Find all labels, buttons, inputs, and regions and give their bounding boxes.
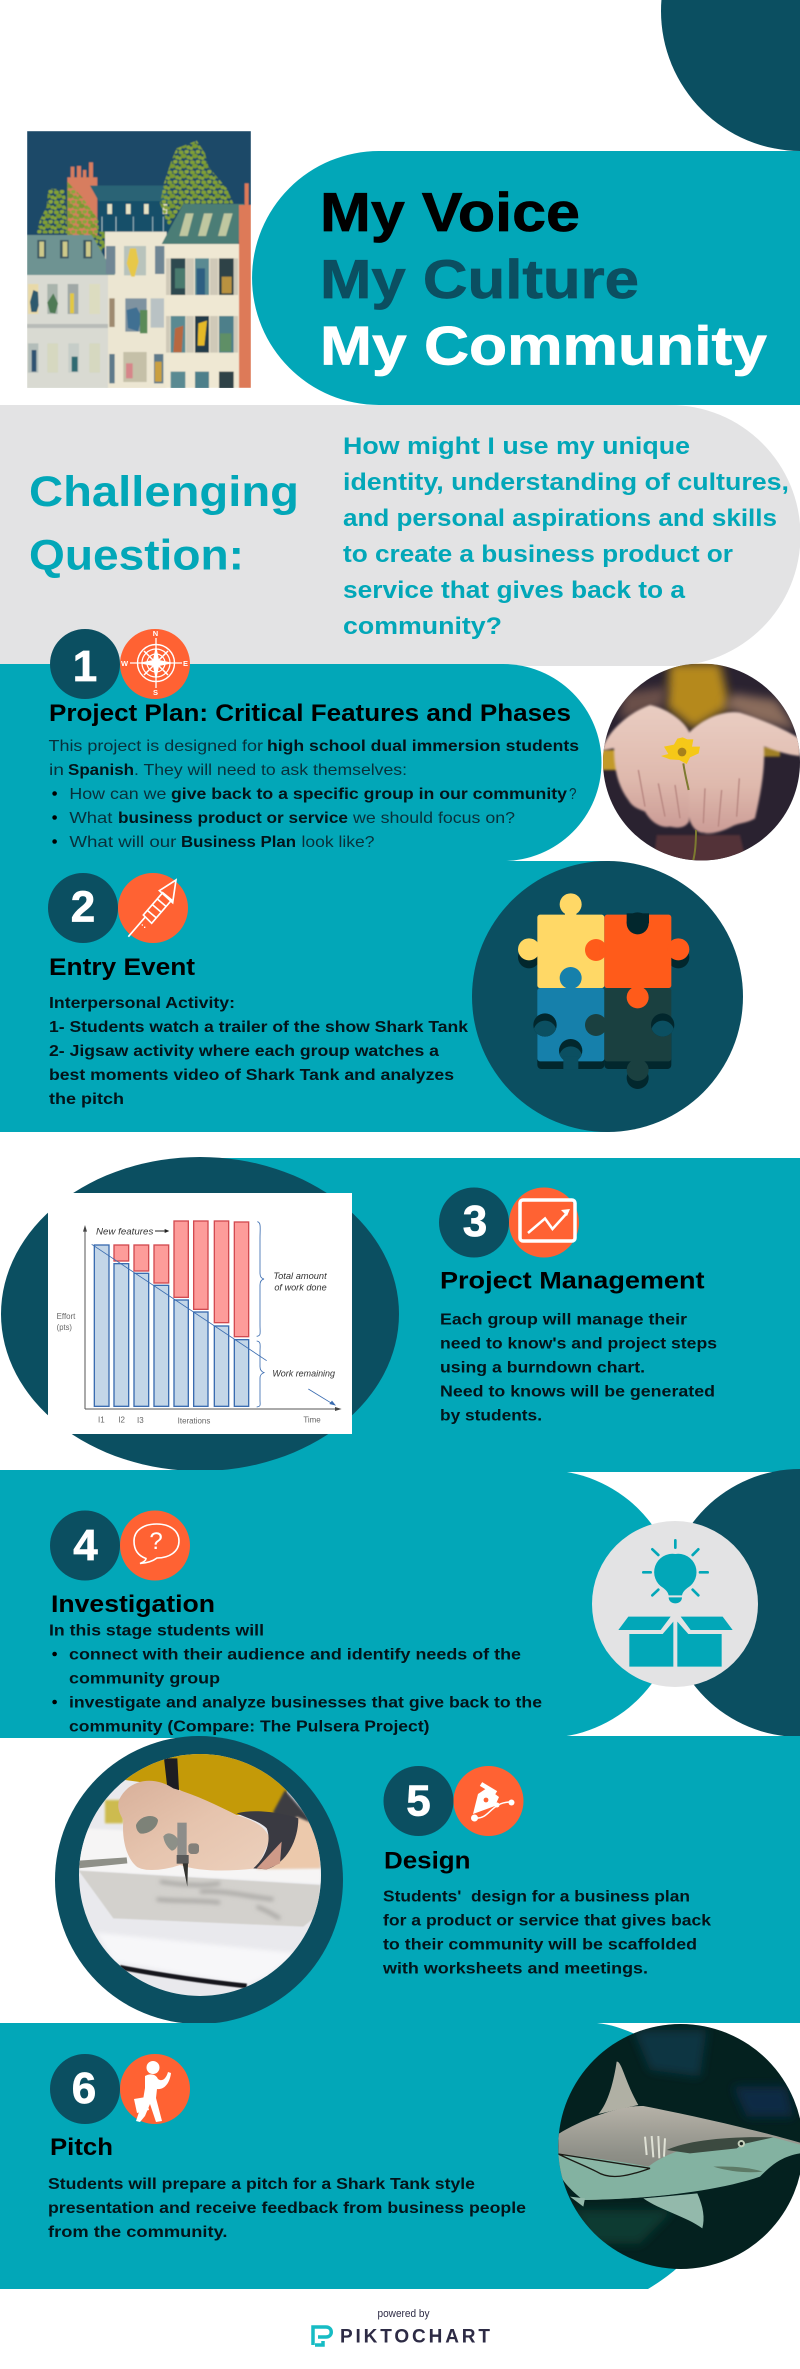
badge: step 4 number <box>50 1510 120 1580</box>
photo: hands holding flower <box>600 663 800 863</box>
entry event heading: Entry Event <box>49 954 195 981</box>
question text: community? <box>343 613 502 640</box>
panel: pitch background <box>0 2023 690 2289</box>
badge: step 2 number <box>48 873 118 943</box>
pitch text <box>48 2176 526 2241</box>
project plan text: ? <box>569 786 577 803</box>
question text: and personal aspirations and skills <box>343 505 777 532</box>
question text: to create a business product or <box>343 541 733 568</box>
project plan text: give back to a specific group in our community <box>171 786 567 803</box>
pitch heading: Pitch <box>50 2134 113 2161</box>
badge: step 5 number: 5 <box>406 1776 431 1826</box>
circle: photo ring <box>55 1736 343 2024</box>
project plan text: high school dual immersion students <box>267 738 579 755</box>
panel: project plan background <box>0 664 602 861</box>
illustration: apartment building <box>27 131 251 388</box>
chart: burndown: I1 <box>98 1415 105 1424</box>
investigation text: In this stage students will <box>49 1622 264 1640</box>
project plan text: . They will need to ask themselves: <box>134 762 407 779</box>
badge: step 6 number <box>50 2054 120 2124</box>
project plan text: we should focus on? <box>352 810 515 827</box>
investigation text <box>49 1622 542 1736</box>
badge: step 2 number: 2 <box>71 882 95 932</box>
question text: How might I use my unique <box>343 433 690 460</box>
chart: burndown: Effort <box>57 1312 76 1321</box>
investigation text: investigate and analyze businesses that give back to the <box>69 1694 542 1712</box>
badge: step 6 number: 6 <box>72 2064 96 2113</box>
investigation text: connect with their audience and identify needs of the <box>69 1646 521 1664</box>
design text <box>382 1888 711 1978</box>
pitch text: from the community. <box>48 2224 228 2241</box>
project plan text: What <box>69 810 113 827</box>
investigation heading: Investigation <box>51 1591 215 1618</box>
entry event text <box>49 995 468 1108</box>
project management heading: Project Management <box>440 1268 704 1294</box>
project management text: using a burndown chart. <box>440 1360 645 1376</box>
design text: with worksheets and meetings. <box>382 1960 648 1978</box>
footer: powered by piktochart: PIKTOCHART <box>340 2326 490 2348</box>
panel: design background <box>199 1736 800 2023</box>
chart: burndown: I2 <box>118 1415 126 1424</box>
ellipse behind chart <box>1 1157 399 1471</box>
icon: growth chart <box>509 1188 579 1258</box>
heading: challenging question: Question: <box>29 532 244 580</box>
badge: step 1 number: 1 <box>73 642 97 691</box>
panel: entry event background <box>0 861 610 1132</box>
investigation text: community (Compare: The Pulsera Project) <box>69 1718 430 1736</box>
design text: for a product or service that gives back <box>383 1912 711 1930</box>
chart: burndown: Work remaining <box>272 1369 335 1379</box>
chart: burndown: I3 <box>137 1416 144 1425</box>
icon: piktochart logo <box>313 2327 331 2345</box>
panel: investigation background <box>0 1470 678 1738</box>
badge: step 3 number: 3 <box>463 1197 487 1246</box>
panel: title banner <box>252 151 800 405</box>
icon: compass <box>120 629 190 699</box>
flower <box>661 737 700 860</box>
project plan text: This project is designed for <box>48 738 264 755</box>
badge: step 3 number <box>439 1188 509 1258</box>
icon: compass: W <box>121 659 129 668</box>
question text: identity, understanding of cultures, <box>343 469 789 496</box>
question text: service that gives back to a <box>343 577 686 604</box>
circle: dark right accent <box>666 1469 800 1737</box>
title: my community: My Community <box>320 314 767 376</box>
chart: burndown: Time <box>303 1415 321 1424</box>
icon: firework rocket <box>118 873 188 943</box>
project plan text: in <box>49 762 64 779</box>
entry event text: the pitch <box>49 1091 124 1108</box>
entry event text: 2- Jigsaw activity where each group watches a <box>49 1043 439 1060</box>
project plan text: business product or service <box>118 810 348 827</box>
chart: burndown: Iterations <box>178 1417 210 1426</box>
project management text: Each group will manage their <box>440 1312 687 1328</box>
red bars: new features <box>114 1221 249 1337</box>
project plan text: What will our <box>69 834 177 851</box>
project plan heading: Project Plan: Critical Features and Phases <box>49 700 571 727</box>
chart: burndown <box>48 1193 352 1434</box>
title: my voice: My Voice <box>320 181 580 243</box>
corner accent shape <box>661 0 800 151</box>
chart: burndown: New features <box>96 1226 154 1236</box>
project plan text: look like? <box>302 834 375 851</box>
project management text: by students. <box>440 1408 542 1424</box>
icon: compass: E <box>183 659 188 668</box>
panel: challenging question <box>0 405 800 666</box>
heading: challenging question <box>29 468 299 580</box>
entry event text: Interpersonal Activity: <box>49 995 235 1012</box>
panel: project management background <box>200 1158 800 1472</box>
footer: powered by piktochart: powered by <box>378 2308 430 2320</box>
project plan text: Business Plan <box>181 834 296 851</box>
badge: step 4 number: 4 <box>73 1521 98 1570</box>
badge: step 5 number <box>384 1766 454 1836</box>
entry event text: 1- Students watch a trailer of the show Shark Tank <box>49 1019 468 1036</box>
project plan text <box>48 738 579 851</box>
entry event text: best moments video of Shark Tank and analyzes <box>49 1067 454 1084</box>
icon: lightbulb and open box <box>592 1521 758 1687</box>
icon: person with briefcase <box>120 2054 190 2124</box>
project management text: Need to knows will be generated <box>440 1384 715 1400</box>
badge: step 1 number <box>50 629 120 699</box>
project management text <box>440 1312 717 1424</box>
investigation text: community group <box>69 1670 220 1688</box>
heading: challenging question: Challenging <box>29 468 299 516</box>
icon: compass: S <box>153 688 158 697</box>
icon: question speech bubble <box>120 1510 190 1580</box>
axes <box>85 1228 338 1409</box>
chart: burndown: (pts) <box>57 1323 72 1332</box>
icon: pen tool <box>454 1766 524 1836</box>
photo: shark <box>555 2020 800 2272</box>
design heading: Design <box>384 1848 470 1874</box>
footer: powered by piktochart <box>313 2308 490 2348</box>
photo: hand drawing with pen <box>79 1753 321 1996</box>
pitch text: presentation and receive feedback from business people <box>48 2200 526 2217</box>
title: my culture: My Culture <box>320 248 639 310</box>
blue bars: work remaining <box>94 1245 249 1406</box>
project management text: need to know's and project steps <box>440 1336 717 1352</box>
icon: question speech bubble: ? <box>149 1528 163 1555</box>
project plan text: Spanish <box>68 762 134 779</box>
icon: compass: N <box>153 629 158 638</box>
chart: burndown: Total amount <box>273 1271 327 1281</box>
design text: Students' design for a business plan <box>383 1888 690 1906</box>
design text: to their community will be scaffolded <box>383 1936 697 1954</box>
question text <box>343 433 789 640</box>
chart: burndown: of work done <box>274 1282 327 1292</box>
circle: puzzle icon <box>472 861 743 1132</box>
pitch text: Students will prepare a pitch for a Shark Tank style <box>48 2176 475 2193</box>
project plan text: How can we <box>69 786 167 803</box>
